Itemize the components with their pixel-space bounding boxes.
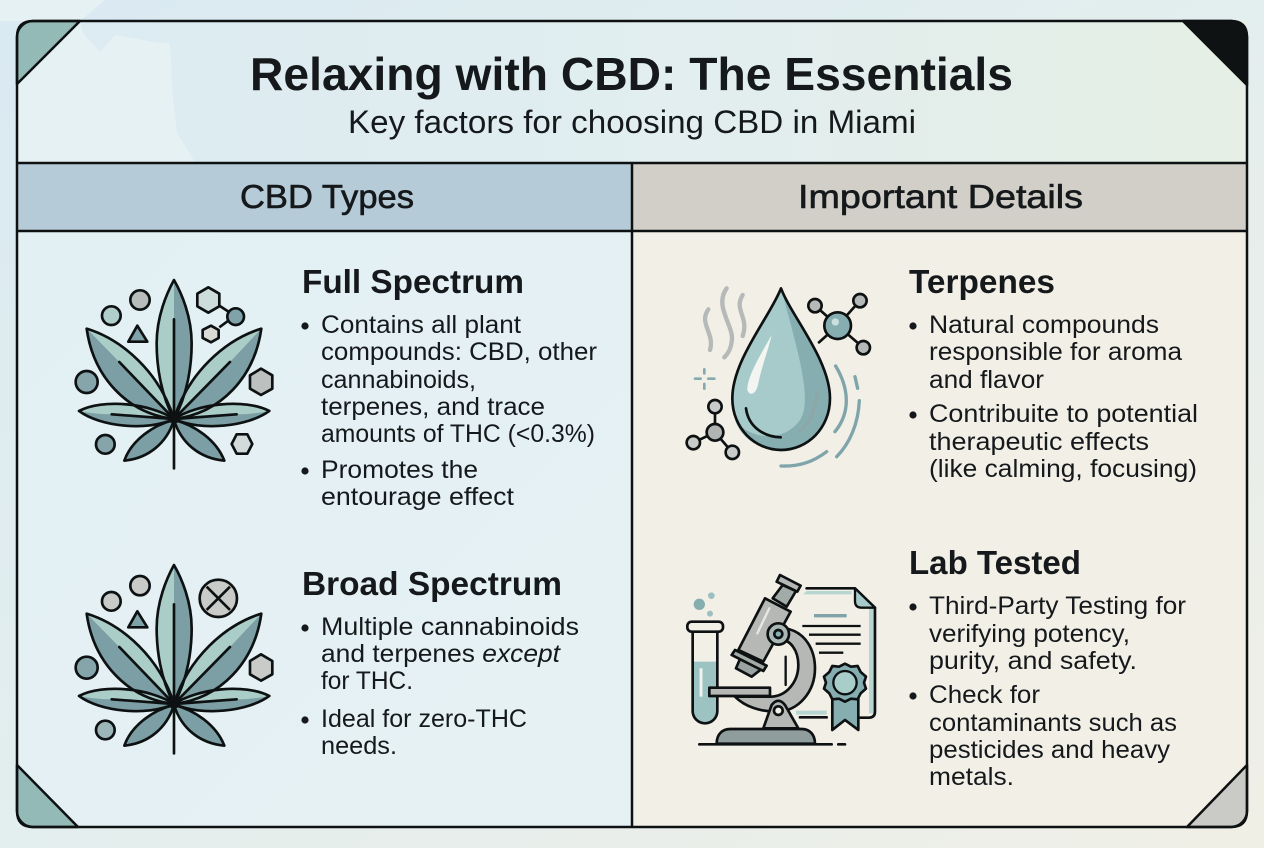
text block: Full Spectrum bullets: amounts of THC (<0.3%) bbox=[321, 420, 595, 448]
text block: Terpenes bullets: (like calming, focusing) bbox=[929, 455, 1197, 483]
corner: bottom right bbox=[1187, 765, 1247, 827]
text block: Broad Spectrum bullets: Ideal for zero-THC bbox=[321, 705, 527, 733]
heading: Broad Spectrum: Broad Spectrum bbox=[302, 565, 562, 602]
text block: Lab Tested bullets: verifying potency, bbox=[929, 620, 1130, 648]
text block: Terpenes bullets: and flavor bbox=[929, 366, 1044, 394]
text block: Terpenes bullets: Natural compounds bbox=[929, 311, 1159, 339]
text block: Terpenes bullets bbox=[909, 311, 1198, 483]
title: Relaxing with CBD: The Essentials bbox=[250, 48, 1013, 100]
text block: Full Spectrum bullets: compounds: CBD, other bbox=[321, 338, 597, 366]
header panel bbox=[17, 21, 1247, 163]
icon: microscope, test tube and certificate bbox=[687, 575, 875, 744]
panel: CBD types bbox=[17, 231, 632, 827]
text block: Full Spectrum bullets: Promotes the bbox=[321, 456, 478, 484]
corner: bottom left bbox=[17, 765, 78, 827]
column header: CBD Types: CBD Types bbox=[240, 178, 414, 215]
text block: Full Spectrum bullets: terpenes, and trace bbox=[321, 393, 545, 421]
column header: Important Details: Important Details bbox=[798, 178, 1083, 215]
heading: Full Spectrum: Full Spectrum bbox=[302, 263, 524, 300]
icon: terpene droplet bbox=[687, 288, 870, 466]
text block: Broad Spectrum bullets: Multiple cannabinoids bbox=[321, 613, 579, 641]
corner: top right bbox=[1183, 21, 1247, 85]
text block: Terpenes bullets: Contribuite to potential bbox=[929, 400, 1198, 428]
text block: Lab Tested bullets: pesticides and heavy bbox=[929, 736, 1171, 764]
text block: Full Spectrum bullets: Contains all plant bbox=[321, 311, 521, 339]
text block: Lab Tested bullets: Third-Party Testing for bbox=[929, 592, 1186, 620]
text block: Broad Spectrum bullets bbox=[301, 613, 579, 760]
subtitle: Key factors for choosing CBD in Miami bbox=[348, 104, 916, 140]
heading: Terpenes: Terpenes bbox=[909, 263, 1055, 300]
text block: Full Spectrum bullets: entourage effect bbox=[321, 483, 514, 511]
column header: CBD Types bbox=[17, 163, 632, 231]
icon: full spectrum leaf bbox=[76, 280, 272, 468]
text block: Terpenes bullets: therapeutic effects bbox=[929, 428, 1149, 456]
heading: Lab Tested: Lab Tested bbox=[909, 544, 1081, 581]
text block: Lab Tested bullets: purity, and safety. bbox=[929, 647, 1137, 675]
corner: top left bbox=[17, 21, 80, 84]
text block: Lab Tested bullets: Check for bbox=[929, 681, 1040, 709]
panel: important details bbox=[632, 231, 1247, 827]
text block: Broad Spectrum bullets: needs. bbox=[321, 732, 397, 760]
text block: Broad Spectrum bullets: for THC. bbox=[321, 667, 413, 695]
text block: Terpenes bullets: responsible for aroma bbox=[929, 338, 1182, 366]
column header: Important Details bbox=[632, 163, 1247, 231]
text block: Full Spectrum bullets bbox=[301, 311, 597, 511]
text block: Lab Tested bullets: contaminants such as bbox=[929, 709, 1177, 737]
text block: Lab Tested bullets bbox=[909, 592, 1186, 791]
text block: Broad Spectrum bullets: and terpenes except bbox=[321, 640, 561, 668]
text block: Full Spectrum bullets: cannabinoids, bbox=[321, 366, 476, 394]
icon: broad spectrum leaf bbox=[76, 565, 272, 753]
text block: Lab Tested bullets: metals. bbox=[929, 763, 1014, 791]
